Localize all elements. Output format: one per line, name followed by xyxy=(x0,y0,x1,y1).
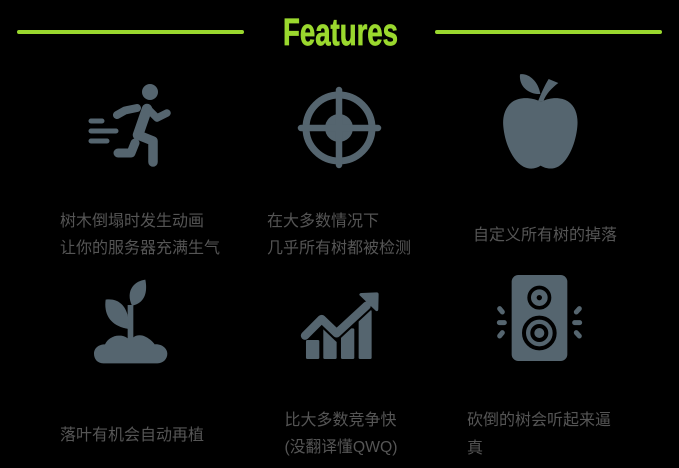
heading: Features: Features xyxy=(283,12,398,54)
text: feature 6: 真 xyxy=(467,439,483,457)
icon: sprout xyxy=(94,280,167,363)
icon: crosshair target xyxy=(301,90,378,165)
icon: rising bar chart xyxy=(305,292,379,359)
text: feature 6: 砍倒的树会听起来逼 xyxy=(467,411,611,429)
text: feature 6 xyxy=(467,411,611,457)
text: feature 1 xyxy=(60,212,220,257)
text: feature 4: 落叶有机会自动再植 xyxy=(60,426,204,444)
heading: Features xyxy=(17,12,662,54)
text: feature 2: 在大多数情况下 xyxy=(267,212,379,230)
text: feature 5: 比大多数竞争快 xyxy=(284,411,397,429)
text: feature 5 xyxy=(284,411,398,456)
text: feature 3: 自定义所有树的掉落 xyxy=(473,226,617,244)
text: feature 1: 树木倒塌时发生动画 xyxy=(60,212,204,230)
icon: running figure xyxy=(91,84,167,162)
icon: apple xyxy=(503,74,578,169)
text: feature 1: 让你的服务器充满生气 xyxy=(60,239,220,257)
text: feature 2: 几乎所有树都被检测 xyxy=(267,239,411,257)
text: feature 2 xyxy=(267,212,411,257)
text: feature 5: (没翻译懂QWQ) xyxy=(284,438,398,456)
icon: speaker xyxy=(499,275,580,361)
